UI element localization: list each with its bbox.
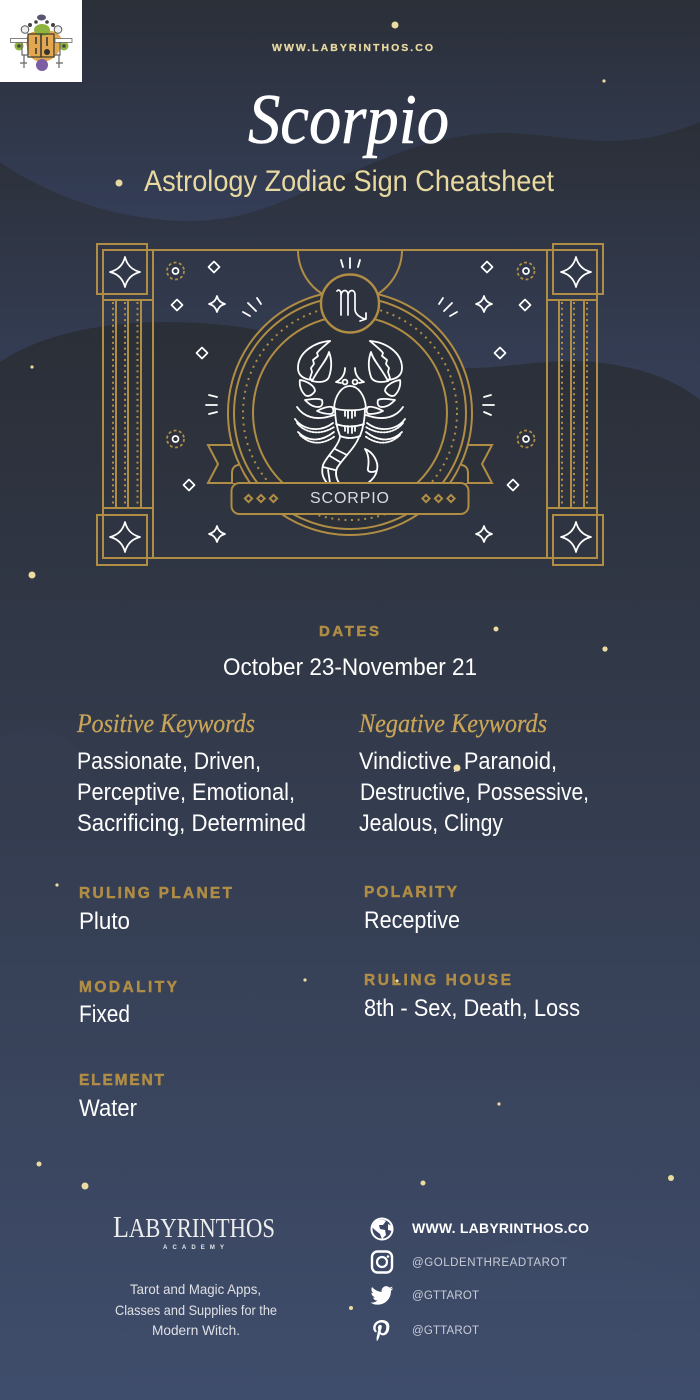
negative keywords: Negative Keywords — [358, 709, 547, 738]
footer links: @GOLDENTHREADTAROT — [412, 1257, 567, 1269]
positive keywords: Positive Keywords — [76, 709, 255, 738]
ruling planet: RULING PLANET — [79, 885, 233, 902]
ruling house — [364, 972, 580, 1022]
dotted rings — [167, 262, 534, 448]
footer tagline: Modern Witch. — [152, 1322, 240, 1338]
footer brand: LABYRINTHOS — [113, 1209, 275, 1244]
footer links: WWW. LABYRINTHOS.CO — [412, 1220, 589, 1236]
footer links — [412, 1220, 589, 1337]
arch — [298, 250, 402, 302]
footer tagline: Classes and Supplies for the — [115, 1302, 277, 1318]
illustration: scorpio zodiac card — [97, 244, 603, 565]
small stars and diamonds — [172, 262, 530, 542]
negative keywords — [358, 709, 589, 837]
footer brand: ACADEMY — [163, 1245, 224, 1251]
negative keywords: Destructive, Possessive, — [360, 779, 589, 806]
icon: pinterest — [373, 1320, 389, 1341]
modality: MODALITY — [79, 979, 178, 996]
scorpion — [295, 341, 405, 483]
footer links: @GTTAROT — [412, 1325, 479, 1337]
stars over text — [395, 764, 460, 983]
logo badge — [0, 0, 82, 82]
element — [79, 1072, 165, 1122]
corner stars — [110, 257, 591, 552]
positive keywords: Sacrificing, Determined — [77, 810, 306, 837]
sign badge — [321, 274, 379, 332]
dates: October 23-November 21 — [223, 654, 477, 681]
title: Scorpio — [248, 81, 449, 159]
ribbon banner: SCORPIO — [310, 490, 389, 507]
ruling planet: Pluto — [79, 908, 130, 935]
ribbon banner — [232, 465, 468, 514]
ruling planet — [79, 885, 233, 935]
frame and columns — [97, 244, 603, 565]
negative keywords: Jealous, Clingy — [359, 810, 503, 837]
negative keywords: Vindictive, Paranoid, — [359, 748, 557, 775]
dates: DATES — [319, 623, 379, 640]
ribbon tails — [208, 445, 492, 483]
polarity: Receptive — [364, 907, 460, 934]
icon: globe — [372, 1218, 392, 1240]
footer tagline: Tarot and Magic Apps, — [130, 1281, 261, 1297]
element: Water — [79, 1095, 137, 1122]
footer tagline — [115, 1281, 277, 1338]
site url: WWW.LABYRINTHOS.CO — [272, 42, 433, 54]
modality — [79, 979, 178, 1028]
subtitle: Astrology Zodiac Sign Cheatsheet — [144, 165, 555, 198]
ruling house: RULING HOUSE — [364, 972, 511, 989]
icon: twitter — [370, 1286, 393, 1305]
modality: Fixed — [79, 1001, 130, 1028]
positive keywords: Perceptive, Emotional, — [77, 779, 295, 806]
polarity: POLARITY — [364, 884, 458, 901]
footer links: @GTTAROT — [412, 1290, 479, 1302]
icon: instagram — [372, 1252, 392, 1272]
positive keywords — [76, 709, 306, 837]
radiating ticks — [206, 258, 494, 415]
element: ELEMENT — [79, 1072, 165, 1089]
positive keywords: Passionate, Driven, — [77, 748, 261, 775]
dates — [223, 623, 477, 681]
polarity — [364, 884, 460, 934]
ruling house: 8th - Sex, Death, Loss — [364, 995, 580, 1022]
medallion rings — [228, 291, 472, 535]
